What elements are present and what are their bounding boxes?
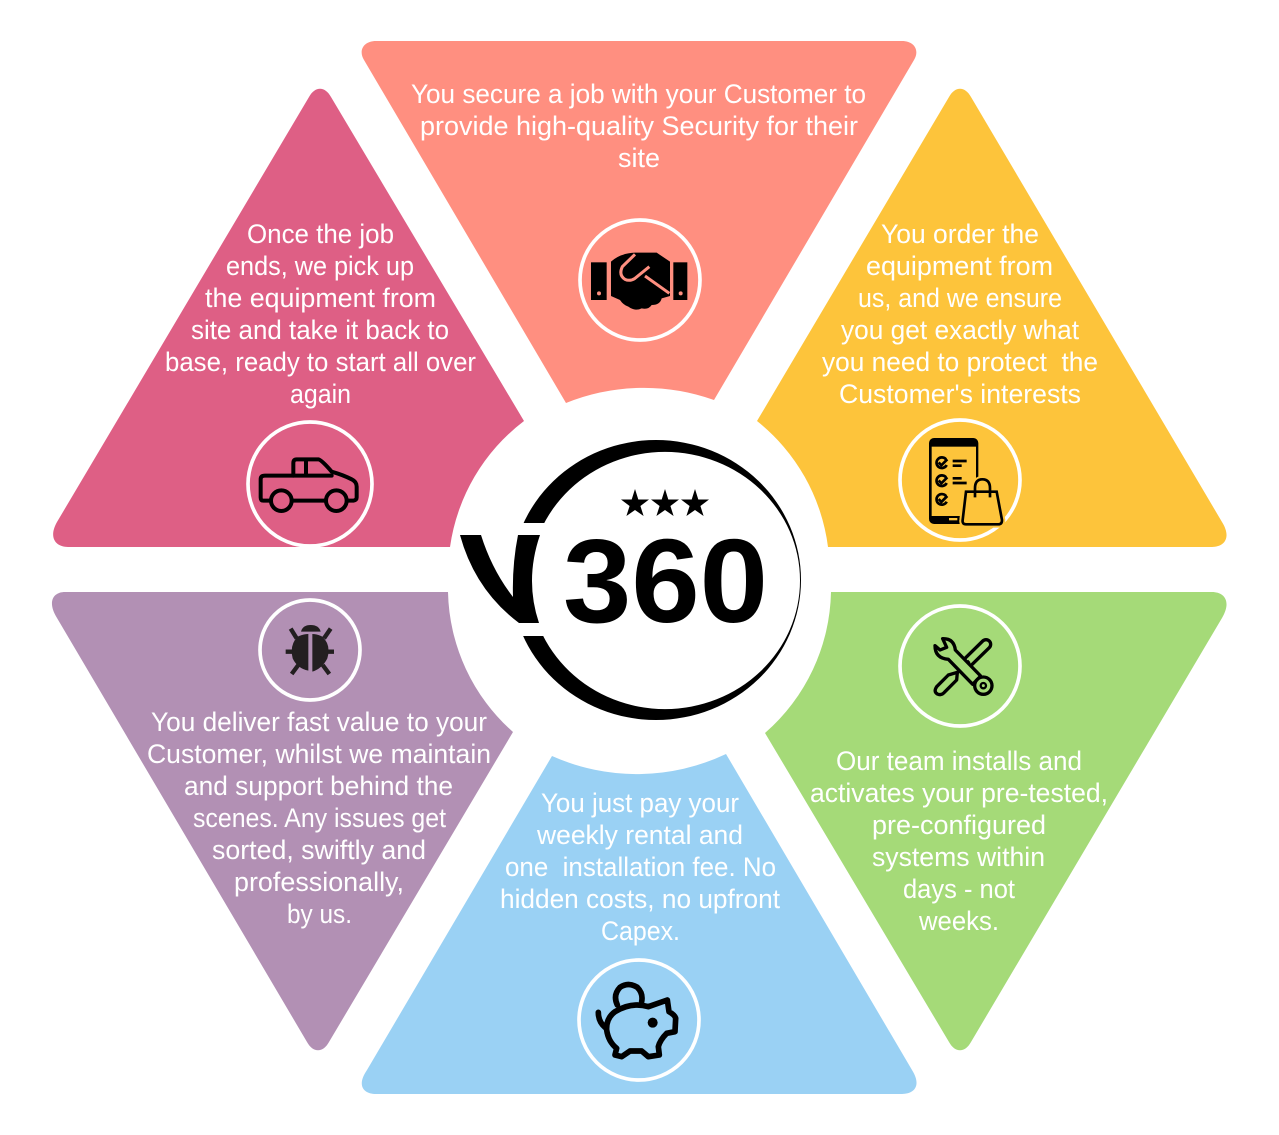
text: pick up equipment: again bbox=[290, 379, 351, 409]
panel: weekly rental bbox=[362, 754, 917, 1094]
logo number 360: 360 bbox=[563, 515, 768, 648]
text: order equipment: equipment from bbox=[866, 251, 1053, 281]
text: fast value: sorted, swiftly and bbox=[212, 835, 426, 865]
logo gap bbox=[505, 523, 567, 636]
text: pick up equipment: ends, we pick up bbox=[226, 251, 414, 281]
text: order equipment: us, and we ensure bbox=[858, 283, 1062, 313]
text: order equipment: You order the bbox=[881, 219, 1039, 249]
text: fast value: professionally, bbox=[234, 867, 404, 897]
text: weekly rental: Capex. bbox=[601, 916, 680, 946]
text: fast value: scenes. Any issues get bbox=[193, 803, 446, 833]
logo stars bbox=[621, 489, 709, 516]
text: fast value: by us. bbox=[287, 899, 352, 929]
text: order equipment: you get exactly what bbox=[841, 315, 1079, 345]
segment shape: green bbox=[765, 592, 1227, 1050]
icon: phone checklist and shopping bag bbox=[900, 420, 1020, 540]
text: weekly rental: weekly rental and bbox=[536, 820, 743, 850]
text: order equipment: Customer's interests bbox=[839, 379, 1081, 409]
icon: bug bbox=[260, 600, 360, 700]
text: install: weeks. bbox=[918, 906, 999, 936]
panel: install bbox=[765, 592, 1227, 1050]
centre logo: V360 bbox=[460, 440, 801, 720]
text: install bbox=[810, 746, 1108, 936]
panel: secure a job bbox=[362, 41, 916, 403]
text: weekly rental: You just pay your bbox=[541, 788, 739, 818]
panel: order equipment bbox=[757, 89, 1227, 547]
text: secure a job bbox=[411, 79, 866, 173]
icon: wrench and screwdriver bbox=[900, 606, 1020, 726]
text: fast value: Customer, whilst we maintain bbox=[147, 739, 491, 769]
text: pick up equipment: base, ready to start all over bbox=[165, 347, 476, 377]
text: secure a job: You secure a job with your Customer to bbox=[411, 79, 866, 109]
text: weekly rental: one installation fee. No bbox=[505, 852, 776, 882]
text: pick up equipment: site and take it back to bbox=[191, 315, 449, 345]
text: install: pre-configured bbox=[872, 810, 1046, 840]
text: fast value: and support behind the bbox=[184, 771, 453, 801]
panel: pick up equipment bbox=[53, 89, 524, 547]
segment shape: yellow bbox=[757, 89, 1227, 547]
text: install: days - not bbox=[903, 874, 1015, 904]
text: install: Our team installs and bbox=[836, 746, 1082, 776]
text: order equipment bbox=[822, 219, 1098, 409]
text: install: systems within bbox=[872, 842, 1045, 872]
text: pick up equipment: Once the job bbox=[247, 219, 394, 249]
text: order equipment: you need to protect the bbox=[822, 347, 1098, 377]
segment shape: blue bbox=[362, 754, 917, 1094]
icon: handshake bbox=[580, 220, 700, 340]
text: fast value bbox=[147, 707, 491, 929]
text: weekly rental: hidden costs, no upfront bbox=[500, 884, 780, 914]
text: secure a job: site bbox=[618, 143, 660, 173]
icon: pickup truck bbox=[248, 422, 372, 546]
segment shape: salmon bbox=[362, 41, 916, 403]
text: pick up equipment: the equipment from bbox=[205, 283, 436, 313]
logo letter V bbox=[460, 535, 540, 623]
icon: piggy bank bbox=[579, 960, 699, 1080]
segment shape: pink bbox=[53, 89, 524, 547]
text: secure a job: provide high-quality Security for their bbox=[420, 111, 858, 141]
text: fast value: You deliver fast value to your bbox=[151, 707, 487, 737]
text: weekly rental bbox=[500, 788, 780, 946]
segment shape: purple bbox=[52, 592, 513, 1050]
text: pick up equipment bbox=[165, 219, 476, 409]
text: install: activates your pre-tested, bbox=[810, 778, 1108, 808]
panel: fast value bbox=[52, 592, 513, 1050]
logo ring bbox=[511, 440, 801, 720]
